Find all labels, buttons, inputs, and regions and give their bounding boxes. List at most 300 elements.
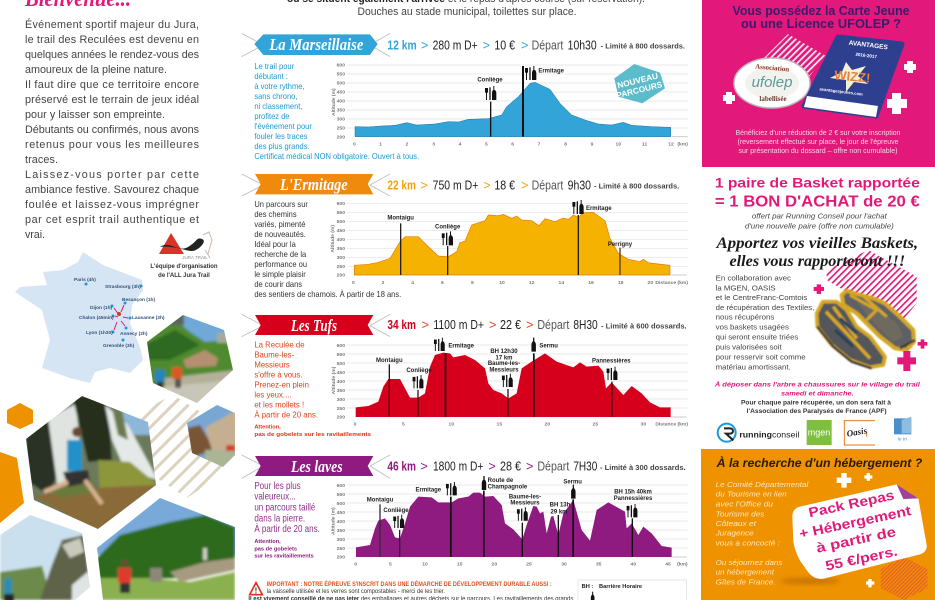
panel: Carte Jeune / UFOLEP [702,0,935,167]
chart: elevation profile: 35 [596,561,602,567]
description: Prenez-en plein [254,380,309,389]
chart: elevation profile: (km) [677,561,688,567]
warning: gobelets [254,539,314,559]
chart: elevation profile: 500 [337,81,345,87]
chart: elevation profile: 4 [459,142,462,148]
race stats: - Limité à 800 dossards. [594,182,679,191]
description: Baume-les- [254,350,294,359]
chart: elevation profile: 10 [499,280,505,286]
description: Un parcours sur [254,200,308,209]
chart: elevation profile: 20 [492,561,497,567]
text: tourism: Le Comité Départemental [716,480,809,489]
text: tourism: Ou séjournez dans [716,558,783,567]
race stats: > [521,178,528,192]
photo: castle hex [187,405,235,467]
chart: elevation profile: Altitude (m) [331,88,337,116]
chart: elevation profile: Conliège [383,508,409,514]
description: débutant : [254,72,288,81]
photo: runners in village [147,315,233,403]
chart: elevation profile: Altitude (m) [331,366,337,394]
race stats: 18 € [494,178,515,192]
heading: 1 paire de Basket rapportée [715,175,920,191]
description [254,340,318,419]
legend: BH barrière horaire: Barrière Horaire [599,584,642,590]
chart: elevation profile: 200 [337,555,345,561]
chart: elevation profile [331,338,688,428]
map: France with travel times: Paris (4h) [74,277,96,283]
chart: elevation profile: Ermitage [416,487,442,493]
description: valeureux... [254,491,296,502]
warning: gobelets [254,425,371,438]
description: Certificat médical NON obligatoire. Ouvert à tous. [254,152,419,161]
race stats: 10h30 [568,38,597,52]
description: recherche de la [254,250,307,259]
warning: gobelets: Attention, [254,539,281,545]
chart: elevation profile: (km) [677,142,688,148]
sticker: pack repas: Pack Repas [807,487,896,520]
race stats: > [420,178,428,192]
heading: Vous possédez la Carte Jeune [732,4,910,18]
race stats [387,178,679,192]
chart: elevation profile: 11 [642,142,648,148]
text: collaboration [716,276,814,372]
chart: elevation profile: 350 [337,528,345,534]
logo: running conseil: runningconseil [739,429,799,439]
chart: elevation profile: BH 15h 40km [614,489,652,495]
badge: ufolep: labellisée [759,95,787,103]
ribbon: La Marseillaise: La Marseillaise [268,35,364,54]
logo: ALL Jura Trail: de l'ALL Jura Trail [158,273,210,279]
map: France with travel times: Strasbourg (3h) [105,284,141,290]
text block: welcome: amoureux de la pleine nature. [25,64,167,76]
text block: welcome: traces. [25,154,58,166]
chart: elevation profile: Conliège [406,368,432,374]
description: profitez de [254,112,290,121]
chart: elevation profile: BH 12h30 [490,349,518,355]
chart: elevation profile: 5 [389,561,392,567]
race stats: Départ [532,38,564,52]
chart: elevation profile: 30 [641,422,646,428]
race stats: Départ [532,178,564,192]
notice: sustainable development: la vaisselle utilisée et les verres sont compostables - merci de les trier. [267,589,445,595]
map: France with travel times: Grenoble (3h) [103,343,135,349]
chart: elevation profile: 12 [668,142,674,148]
logo: mgen: mgen [808,428,830,438]
icon: warning triangle: ! [255,586,257,595]
heading: À la recherche d'un hébergement ? [716,457,922,470]
chart: elevation profile: 8 [564,142,567,148]
race stats: 1800 m D+ [433,459,483,473]
chart: elevation profile: 9 [591,142,594,148]
text block: welcome: Il faut dire que ce territoire encore [25,79,199,91]
text block: welcome: ambiance festive. Savourez chaque [25,184,199,196]
hexagon: small orange [7,403,33,429]
race stats: 34 km [387,318,416,332]
text: discount [736,128,900,155]
chart: elevation profile: Messieurs [489,368,519,374]
text: collaboration: la MGEN, OASIS [716,285,776,292]
ribbon: Les laves: Les laves [290,457,343,476]
text: tourism: Gîtes de France. [716,577,776,586]
stripes hexagon [827,250,917,323]
map: France with travel times: Lyon (1h30) [86,330,113,336]
text: collaboration: vos baskets usagées [716,325,790,332]
description: l'événement pour [254,122,312,131]
chart: elevation profile: 300 [337,117,345,123]
text: tourism: Tourisme des [716,509,765,518]
chart: elevation profile: 400 [337,99,345,105]
chart: elevation profile: 600 [337,63,345,69]
chart: elevation profile: 300 [337,537,345,543]
map: France with travel times: Dijon (1h) [90,305,113,311]
ribbon: L'Ermitage: L'Ermitage [279,175,348,194]
notice: sustainable development [248,579,573,600]
chart: elevation profile: 550 [337,210,345,216]
chart: elevation profile: 600 [337,483,345,489]
sticker: pack repas [792,484,927,579]
chart: elevation profile: 29 km [551,510,567,516]
logo: running conseil [718,424,799,442]
text: tourism: Juragence [715,529,754,538]
race stats: 22 € [500,318,521,332]
chart: elevation profile: Distance (km) [655,280,688,286]
race stats: 22 km [387,178,416,192]
intro text: practical info [287,0,645,18]
text: APF donation: Pour chaque paire récupérée, un don sera fait à [741,401,892,407]
chart: elevation profile: 300 [337,255,345,261]
description: de courir dans [254,280,302,289]
warning: gobelets: pas de gobelets sur les ravitaillements [254,432,371,438]
race stats: > [526,459,533,473]
chart: elevation profile: 20 [648,280,653,286]
description: Idéal pour la [254,240,296,249]
chart: elevation profile: BH 13h [550,502,571,508]
photo: village runner [95,495,240,600]
text: collaboration: qui seront ensuite triées [716,334,799,341]
section: La Marseillaise [242,33,688,161]
text block: welcome: Événement sportif majeur du Jura, [25,18,199,31]
ribbon: La Marseillaise [242,33,390,57]
text: collaboration: En collaboration avec [716,276,792,283]
section: Les Tufs [242,314,688,438]
chart: elevation profile: 15 [497,422,502,428]
icons: plus signs [837,473,874,587]
chart: elevation profile: 500 [337,501,345,507]
chart: elevation profile [331,476,688,567]
warning: gobelets: Attention, [254,425,281,431]
text: tourism: un hébergement [716,568,775,577]
script headline: Apportez vos vieilles Baskets, [715,235,918,252]
description: fouler les traces [254,132,307,141]
race stats: 8H30 [573,318,598,332]
intro text: practical info: Douches au stade municipal, toilettes sur place. [358,6,576,18]
chart: elevation profile: 14 [559,280,564,286]
chart: elevation profile: 600 [337,343,345,349]
race stats: > [422,318,429,332]
chart: elevation profile: 10 [449,422,454,428]
race stats [387,38,685,52]
race stats: 46 km [387,459,416,473]
text block: welcome: vrai. [25,229,45,241]
description: et les mollets ! [254,400,304,409]
description: sans chrono, [254,92,297,101]
chart: elevation profile: 18 [618,280,624,286]
ribbon: L'Ermitage [242,174,390,196]
icons: pink plus signs [814,284,927,371]
chart: elevation profile: Perrigny [608,242,633,248]
chart: elevation profile: Montaigu [387,216,414,222]
text: drop-off: samedi et dimanche. [781,391,854,398]
text block: welcome: foulée et laissez-vous imprégner [25,199,199,211]
section: Les laves [242,455,688,600]
logo: ALL Jura Trail [150,232,218,279]
chart: elevation profile: 17 km [496,356,512,362]
description: à votre rythme, [254,82,305,91]
chart: elevation profile: 550 [337,352,345,358]
race stats: > [420,459,428,473]
chart: elevation profile: 200 [337,415,345,421]
map: France with travel times: Annecy (2h) [120,331,148,337]
race stats: 9h30 [568,178,591,192]
warning: gobelets: pas de gobelets [254,546,297,552]
chart: elevation profile: 250 [337,406,345,412]
chart: elevation profile: Baume-les- [488,361,520,367]
race stats: > [483,178,491,192]
map: France with travel times: Lausanne (2h) [132,315,165,321]
race stats: > [488,459,496,473]
sticker: pack repas: + Hébergement [798,503,913,541]
chart: elevation profile: Distance (km) [655,422,688,428]
card: Avantages Jeunes: avantagesjeunes.com [819,86,863,97]
text: tourism: vous a concocté : [716,539,780,548]
description [254,62,419,161]
description: le simple plaisir [254,270,306,279]
ribbon: Les laves [242,455,390,478]
logo: ALL Jura Trail: L'équipe d'organisation [150,264,218,270]
race stats: Départ [537,318,570,332]
race stats: 7H30 [573,459,597,473]
race stats: Départ [537,459,570,473]
description: un parcours taillé [254,502,315,513]
chart: elevation profile: 0 [353,142,356,148]
race stats: 750 m D+ [433,178,478,192]
race stats: - Limité à 300 dossards. [600,463,686,472]
background stripes hexagon [137,395,235,498]
icon: warning triangle [250,583,262,595]
chart: elevation profile: 8 [471,280,474,286]
race stats: > [526,318,533,332]
logo: oasis: Oasis [846,425,868,439]
description: Le trail pour [254,62,294,71]
ribbon: Les Tufs: Les Tufs [290,316,337,335]
chart: elevation profile: 5 [485,142,488,148]
chart: elevation profile: 500 [337,361,345,367]
chart: elevation profile: 0 [354,561,357,567]
chart: elevation profile: 200 [337,134,345,140]
chart: elevation profile: 450 [337,90,345,96]
chart: elevation profile: 350 [337,388,345,394]
card: Avantages Jeunes [804,37,902,117]
description [254,480,320,534]
sticker: pack repas: à partir de [815,524,898,556]
chart: elevation profile: Conliège [435,225,461,231]
icons: plus signs [723,61,916,114]
chart: elevation profile: 25 [526,561,532,567]
notice: sustainable development: IMPORTANT : NOTRE ÉPREUVE S'INSCRIT DANS UNE DÉMARCHE DE DÉVELOPPEMENT DURABLE AUSSI : [267,579,552,588]
text: tourism: Côteaux et [716,519,757,528]
logo: mgen [807,420,832,445]
text: collaboration: et le CentreFranc-Comtois [716,295,808,302]
logo: ALL Jura Trail: JURA TRAIL [182,255,208,260]
text: collaboration: de récupération des Textiles, [716,305,814,312]
chart: elevation profile: 250 [337,546,345,552]
sticker: pack repas: 55 €/pers. [824,544,899,574]
chart: elevation profile: 16 [588,280,594,286]
race stats: - Limité à 800 dossards. [601,42,685,51]
badge: nouveau parcours: NOUVEAU [616,71,659,90]
race stats: 280 m D+ [433,38,478,52]
text: discount: sur présentation du dossard – offre non cumulable) [738,146,898,155]
description: de nouveautés. [254,230,306,239]
text block: welcome: Débutants ou confirmés, nous avons [25,124,200,136]
description: Messieurs [254,360,290,369]
chart: elevation profile: 10 [616,142,621,148]
chart: elevation profile [330,200,688,286]
badge: ufolep: ufolep [752,74,792,91]
text block: welcome: retenus pour vous les meilleures [25,139,200,151]
text: collaboration: puis valorisées soit [716,345,782,352]
badge: nouveau parcours: PARCOURS [615,79,664,100]
card: Avantages Jeunes: 2016-2017 [855,52,878,59]
chart: elevation profile: Sermu [563,479,582,485]
chart: elevation profile: 15 [457,561,463,567]
chart: elevation profile: 450 [337,510,345,516]
logo: le tri [894,417,911,443]
text: drop-off [714,379,920,398]
text block: welcome: pour y laisser son empreinte. [25,109,165,121]
chart: elevation profile: 250 [337,126,345,132]
chart: elevation profile: Pannessières [592,359,631,365]
chart: elevation profile: Route de [488,478,514,484]
race stats: 12 km [387,38,417,52]
race stats: - Limité à 600 dossards. [601,322,687,331]
text block: welcome: par cet esprit trail authentique et [25,214,199,226]
chart: elevation profile: Altitude (m) [331,507,337,535]
map: France with travel times: Chalon (45min) [79,315,114,321]
warning: gobelets: sur les ravitaillements [254,553,314,559]
chart: elevation profile: 25 [593,422,598,428]
chart: elevation profile: Ermitage [538,69,565,75]
chart: elevation profile: 7 [538,142,541,148]
description: des chemins [254,210,297,219]
chart: elevation profile: 550 [337,72,345,78]
badge: ufolep: Association [755,63,790,73]
heading [715,175,920,211]
description: Pour les plus [254,480,301,491]
chart: elevation profile: 1 [379,142,382,148]
chart: elevation profile: 3 [432,142,435,148]
description: dans la pierre. [254,513,305,524]
chart: elevation profile: 350 [337,108,345,114]
chart: elevation profile: 4 [411,280,414,286]
text: tourism: avec l'Office du [716,499,773,508]
chart: elevation profile: 500 [337,219,345,225]
card: Avantages Jeunes: WIZZ! [834,67,871,86]
chart: elevation profile: 2 [406,142,409,148]
race stats: > [489,318,496,332]
race stats [387,318,687,332]
description: variés, pimenté [254,220,306,229]
chart: elevation profile: 250 [337,264,345,270]
chart: elevation profile: Messieurs [510,501,540,507]
text block: welcome: préservé est le terrain de jeux idéal [25,94,199,106]
chart: elevation profile: 350 [337,246,345,252]
chart: elevation profile: 450 [337,228,345,234]
chart: elevation profile: Baume-les- [509,495,541,501]
description: performance ou [254,260,307,269]
badge: ufolep [734,58,810,108]
race stats: > [421,38,428,52]
description [254,200,401,299]
chart: elevation profile: Montaigu [376,358,403,364]
chart: elevation profile: 10 [422,561,428,567]
text block: welcome: Laissez-vous porter par cette [25,169,199,181]
logo: oasis [844,421,875,445]
hexagon: orange stripes [881,557,927,600]
hexagon: large orange [0,452,24,523]
card: Avantages Jeunes: AVANTAGES [848,40,889,51]
text: APF donation [741,401,892,415]
description: À partir de 20 ans. [254,523,320,534]
chart: elevation profile: Champagnole [488,485,528,491]
chart: elevation profile: Conliège [477,77,503,83]
subheading: offert par Running Conseil pour l'achat [752,214,888,221]
script headline: elles vous rapporteront !!! [729,253,905,270]
chart: elevation profile: 6 [511,142,514,148]
legend: BH barrière horaire [578,580,687,600]
race stats [387,459,686,473]
heading: = 1 BON D'ACHAT de 20 € [715,194,920,211]
chart: elevation profile: 300 [337,397,345,403]
chart: elevation profile: 2 [382,280,385,286]
photo: rock and runner [0,515,90,600]
chart: elevation profile: 400 [337,519,345,525]
description: s'offre à vous. [254,370,302,379]
text: discount: Bénéficiez d'une réduction de 2 € sur votre inscription [736,128,900,137]
chart: elevation profile: Pannessières [614,496,653,502]
stripes diamond [752,34,826,100]
chart: elevation profile: 0 [352,280,355,286]
text block: welcome: quelques années le rendez-vous des [25,49,200,61]
description: des sentiers de chamois. À partir de 18 ans. [254,290,401,299]
heading [732,4,910,31]
panel: hébergement [701,449,935,600]
description: des plus grands. [254,142,310,151]
chart: elevation profile: 200 [337,273,345,279]
description: La Reculée de [254,340,305,349]
heading: ou une Licence UFOLEP ? [741,17,901,31]
chart: elevation profile: 40 [631,561,636,567]
description: les yeux.... [254,390,292,399]
chart: elevation profile: 45 [665,561,671,567]
text: discount: (reversement effectué sur place, le jour de l'épreuve [738,137,898,146]
chart: elevation profile: 600 [337,201,345,207]
subheading [745,214,894,231]
badge: nouveau parcours [614,64,665,103]
photo: running shoes [817,291,915,368]
subheading: d'une nouvelle paire (offre non cumulable) [745,224,894,231]
chart: elevation profile: Altitude (m) [330,225,336,253]
